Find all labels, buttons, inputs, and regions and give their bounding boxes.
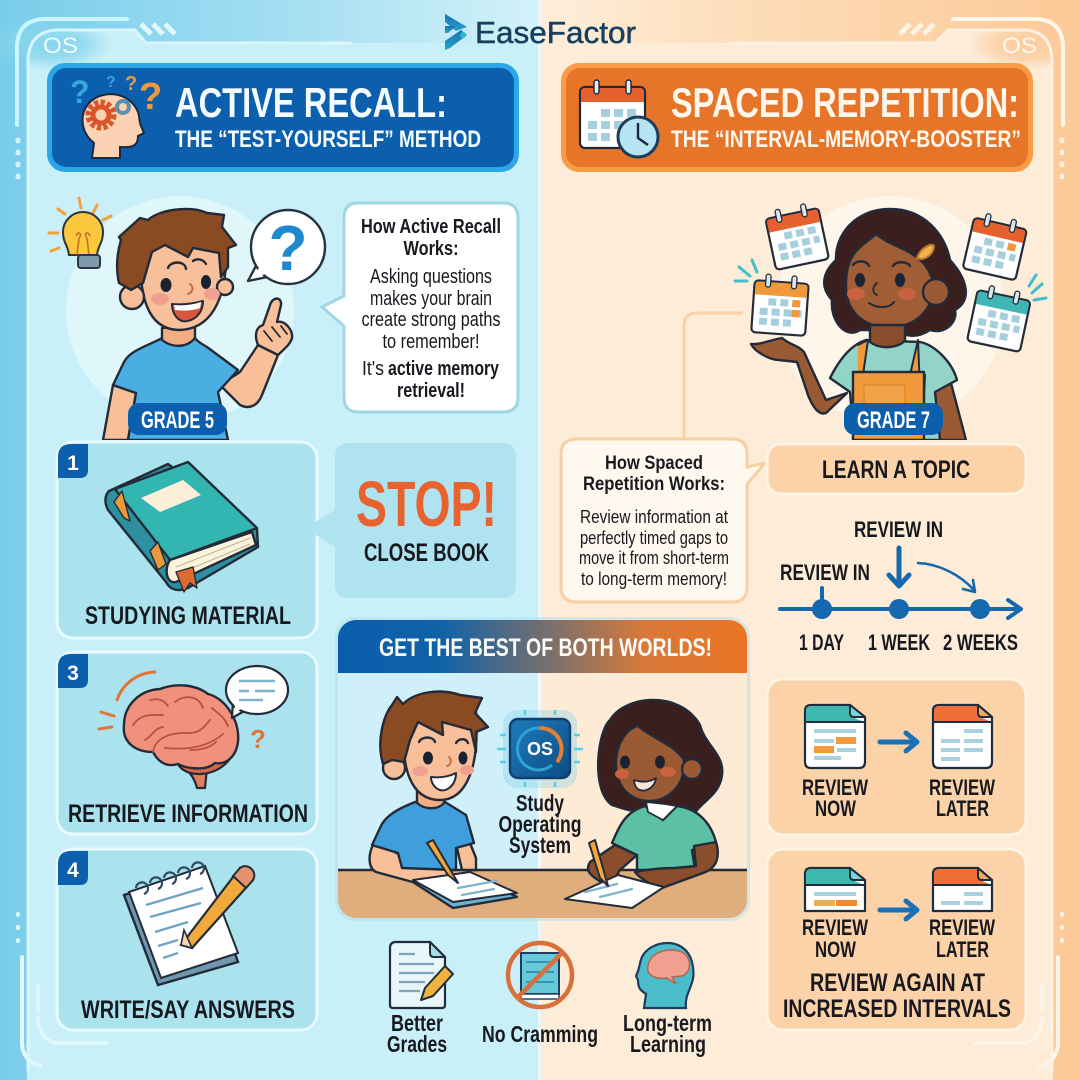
label: long-term learning: Long-term (623, 1010, 712, 1036)
callout: stop close book: STOP! (356, 468, 497, 540)
badge: Grade 5 (128, 403, 227, 435)
label: STUDYING MATERIAL (85, 602, 291, 630)
panel: review now and later: LATER (936, 796, 989, 821)
callout: how spaced repetition works: How Spaced (605, 453, 703, 474)
icon: calendar lower right (967, 283, 1032, 352)
character glow: girl (776, 196, 1004, 424)
callout: how active recall works: Works: (404, 238, 458, 260)
label: study operating system (498, 790, 582, 858)
icon: head with gears: ? (139, 76, 162, 118)
labels: REVIEW (802, 775, 868, 800)
panel heading: GET THE BEST OF BOTH WORLDS! (379, 634, 712, 662)
callout: how active recall works: create strong paths (362, 309, 500, 331)
icon: calendar top right (963, 211, 1029, 280)
timeline chart: 1 WEEK (868, 630, 930, 655)
timeline chart: 2 WEEKS (943, 630, 1018, 655)
frame: bottom left corner (18, 914, 106, 1066)
callout: how spaced repetition works: move it from short-term (579, 548, 729, 568)
icon: brain with speech bubble: ? (250, 724, 266, 754)
icon: review later short document (933, 868, 992, 911)
label: better grades (387, 1010, 447, 1057)
character glow: boy (66, 196, 294, 424)
character: girl studying (565, 700, 722, 908)
frame: left top corner (17, 19, 350, 1070)
arrow (880, 901, 917, 919)
icon: no cramming (508, 943, 572, 1007)
right inner panel (540, 30, 1053, 1080)
header title: ACTIVE RECALL: (175, 79, 447, 126)
icon: notepad and pencil (124, 862, 254, 985)
step number 1 (58, 444, 88, 478)
icon: brain with speech bubble (99, 666, 288, 788)
label: long-term learning: Learning (630, 1031, 706, 1057)
header subtitle: THE “TEST-YOURSELF” METHOD (175, 126, 481, 153)
icon: long-term learning head (636, 943, 694, 1008)
badge: Grade 7 (844, 403, 943, 435)
icon: study operating system chip: OS (527, 739, 553, 759)
callout: how active recall works: makes your brain (370, 288, 492, 310)
timeline chart: REVIEW IN (780, 560, 870, 585)
panel: review again at increased intervals: LATER (936, 937, 989, 962)
callout: how spaced repetition works: Repetition Works: (583, 474, 725, 495)
icon: calendar on hand (751, 273, 809, 336)
panel: review again at increased intervals: INCREASED INTERVALS (783, 995, 1011, 1023)
callout: how active recall works: It's (362, 358, 384, 380)
review in labels: REVIEW IN (854, 517, 943, 542)
right corner glow (968, 18, 1080, 70)
center divider (538, 0, 541, 1080)
callout: how spaced repetition works (561, 439, 765, 602)
callout: how active recall works: How Active Recall (361, 216, 501, 238)
callout: how active recall works: Asking questions (370, 266, 492, 288)
icon: head with gears: ? (70, 74, 90, 110)
panel: Spaced Repetition header (561, 63, 1033, 172)
down arrow (889, 548, 909, 586)
timeline dots (812, 599, 990, 619)
panel: review now and later (767, 679, 1026, 835)
logo wordmark: EaseFactor (475, 15, 636, 50)
step number 1: 1 (67, 452, 79, 475)
label: WRITE/SAY ANSWERS (81, 996, 295, 1024)
caption: REVIEW AGAIN AT (810, 969, 985, 997)
panel: step 1 studying material (57, 442, 317, 638)
character: Grade 7 girl (751, 209, 966, 440)
panel: review now and later: NOW (815, 796, 856, 821)
frame: right OS mark: OS (1002, 33, 1037, 58)
panel: get the best of both worlds (338, 620, 747, 918)
label: RETRIEVE INFORMATION (68, 800, 308, 828)
icon: question speech bubble (248, 210, 325, 284)
background: blue left half (0, 0, 540, 1080)
step number 4 (58, 851, 88, 885)
icon: study operating system chip (497, 710, 583, 788)
panel: step 3 retrieve information (57, 652, 317, 834)
panel: step 4 write or say answers (57, 849, 317, 1030)
panel: Active Recall header (47, 63, 519, 172)
icon: head with gears: ? (125, 73, 137, 95)
callout: stop close book: CLOSE BOOK (364, 539, 489, 567)
panel: review now and later: REVIEW (929, 775, 995, 800)
panel: learn a topic: LEARN A TOPIC (822, 456, 970, 484)
callout: how active recall works: retrieval! (397, 380, 465, 402)
callout: how spaced repetition works: perfectly timed gaps to (580, 528, 728, 548)
left inner panel (27, 30, 540, 1080)
arrow (880, 733, 917, 751)
connector line (684, 313, 743, 440)
frame: right top corner (730, 19, 1063, 1070)
panel: review again at increased intervals (767, 849, 1026, 1030)
step number 4: 4 (67, 859, 79, 882)
step number 3: 3 (67, 662, 79, 685)
icon: better grades document (390, 942, 453, 1008)
character: boy studying (370, 692, 517, 908)
icon: head with gears: ? (106, 74, 116, 91)
panel: learn a topic (767, 444, 1026, 494)
character: Grade 5 boy (103, 209, 292, 440)
icon: closed book (105, 462, 258, 592)
label: long-term learning (623, 1010, 712, 1057)
logo (445, 14, 636, 50)
icon: light bulb (49, 198, 111, 268)
timeline chart (780, 517, 1021, 655)
callout: how spaced repetition works: to long-term memory! (581, 569, 727, 589)
label: study operating system: Operating (498, 811, 582, 837)
frame: bottom right corner (974, 914, 1062, 1066)
left corner glow (0, 18, 112, 70)
icon: question speech bubble: ? (268, 212, 308, 284)
badge: Grade 5: GRADE 5 (141, 407, 214, 434)
callout: how spaced repetition works: Review information at (580, 507, 728, 527)
timeline axis (780, 588, 1021, 618)
icon: calendar top left (764, 201, 829, 270)
callout: stop close book (305, 443, 516, 598)
label: better grades: Better (391, 1010, 443, 1036)
icon: calendar and clock (580, 80, 658, 157)
icon: calendar sparks (735, 260, 1046, 300)
icon: review now document (805, 705, 865, 768)
logo mark (445, 14, 467, 50)
icon: review now short document (805, 868, 865, 911)
interval labels: 1 DAY (799, 630, 844, 655)
label: study operating system: System (509, 832, 571, 858)
callout: how active recall works (322, 203, 518, 412)
label: no cramming: No Cramming (482, 1021, 598, 1047)
label: better grades: Grades (387, 1031, 447, 1057)
curved arrow (918, 563, 975, 592)
step number 3 (58, 654, 88, 688)
callout: how active recall works: to remember! (382, 331, 480, 353)
labels: REVIEW (802, 915, 868, 940)
panel: review again at increased intervals: NOW (815, 937, 856, 962)
icon: review later document (933, 705, 992, 768)
panel: review again at increased intervals: REVIEW (929, 915, 995, 940)
background: orange right half (540, 0, 1080, 1080)
badge: Grade 7: GRADE 7 (857, 407, 930, 434)
callout: how active recall works: active memory (388, 358, 500, 380)
icon: head with gears (70, 73, 162, 158)
frame: left OS mark: OS (43, 33, 78, 58)
label: study operating system: Study (516, 790, 564, 816)
